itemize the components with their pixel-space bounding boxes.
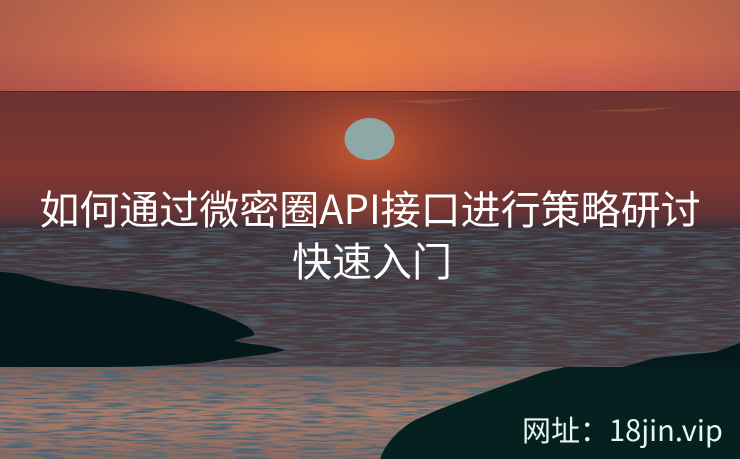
upper sea with sun glow bbox=[0, 91, 740, 228]
title bbox=[39, 178, 701, 288]
title: 如何通过微密圈API接口进行策略研讨 bbox=[39, 178, 701, 236]
lower bright water bbox=[0, 367, 740, 459]
title: 快速入门 bbox=[292, 230, 452, 288]
right island bbox=[380, 343, 740, 459]
mid water bbox=[0, 228, 740, 367]
sun bbox=[344, 118, 394, 160]
website label: 网址：18jin.vip bbox=[522, 408, 723, 450]
sky bbox=[0, 0, 740, 91]
left island bbox=[0, 272, 285, 367]
